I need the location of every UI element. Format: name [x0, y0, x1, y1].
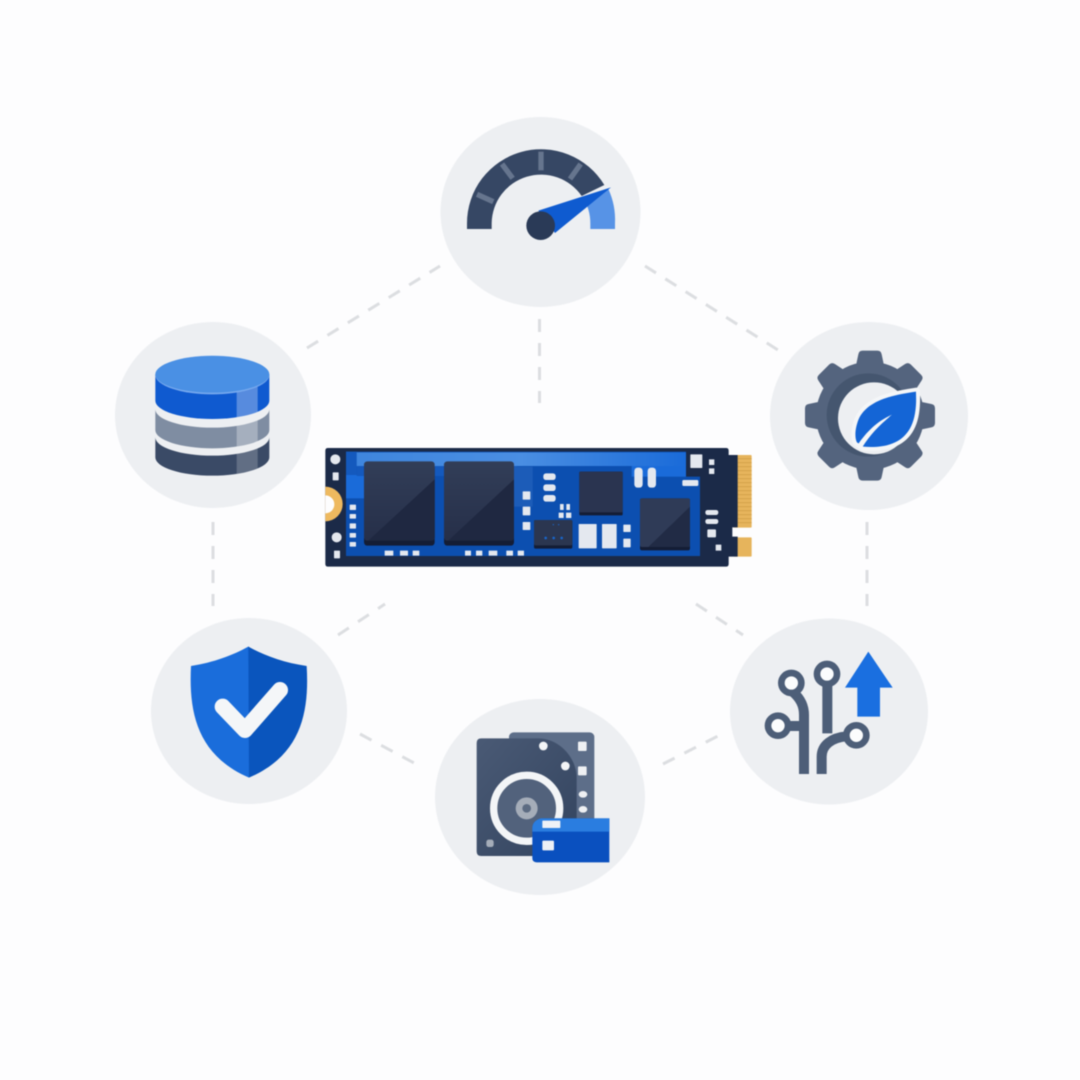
dashed connectors	[213, 266, 867, 764]
mounting notch	[325, 487, 343, 521]
gold connector fingers	[733, 455, 752, 557]
blue PCB area	[346, 452, 700, 556]
M.2 SSD circuit board	[325, 448, 752, 567]
controller chips	[534, 472, 690, 550]
white components	[330, 454, 721, 558]
diagram	[115, 117, 968, 895]
icon: speed gauge	[440, 117, 640, 307]
icon: database stack	[115, 322, 311, 508]
icon: circuit traces with up arrow	[730, 618, 928, 804]
board body	[325, 448, 738, 567]
icon: security shield with check	[151, 618, 347, 804]
memory chip 2	[444, 461, 514, 546]
memory chip 1	[364, 461, 435, 546]
icon: gear with leaf	[770, 322, 968, 510]
icon: hard drive with card	[435, 699, 645, 895]
